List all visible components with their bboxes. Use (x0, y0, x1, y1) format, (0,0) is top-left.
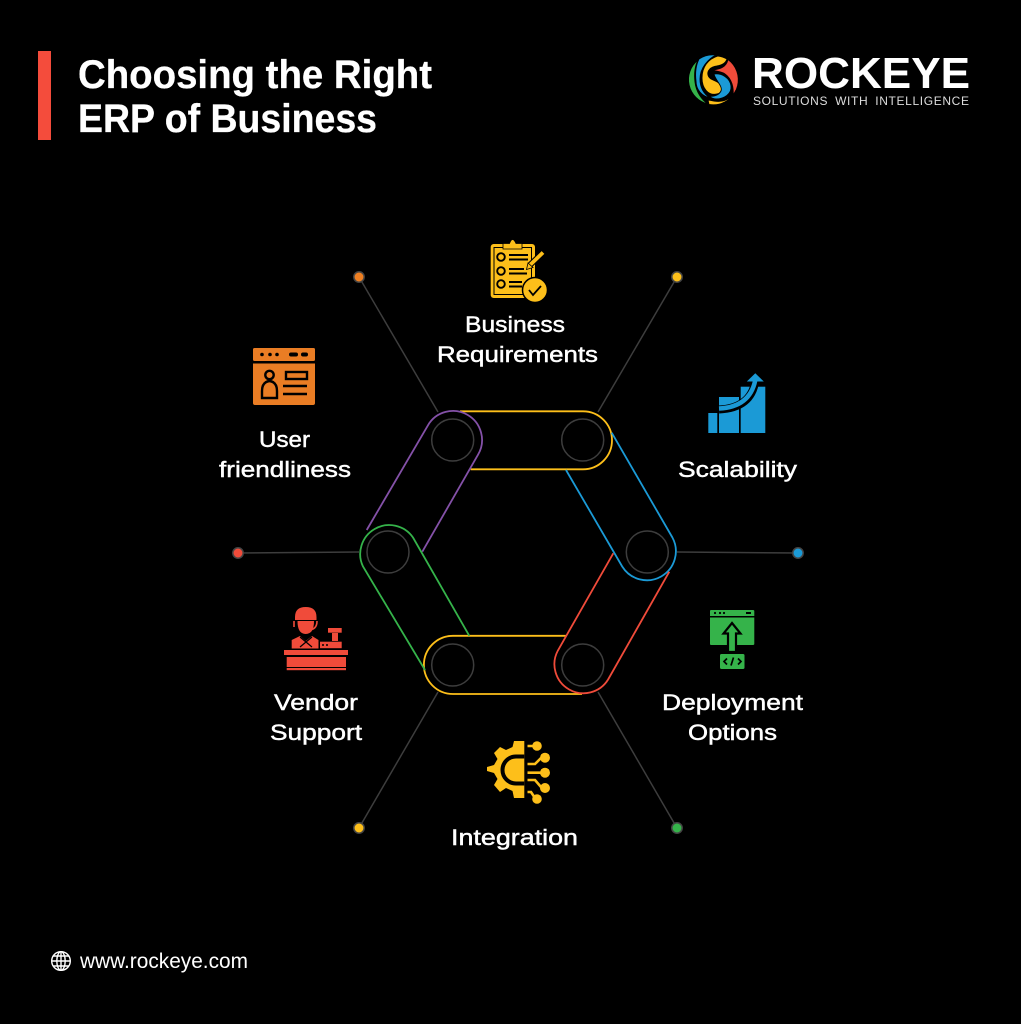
link: red (554, 553, 669, 693)
footer: website (52, 950, 248, 973)
spoke end dots (233, 272, 803, 833)
spokes (238, 277, 798, 828)
website address: www.rockeye.com (79, 950, 248, 973)
icon: deployment window with code (710, 610, 754, 669)
link: blue (566, 433, 676, 580)
label: Business Requirements: Requirements (437, 342, 598, 367)
link: purple (367, 411, 482, 552)
link: top yellow (460, 411, 612, 469)
logo swirl icon (689, 55, 738, 105)
label: User friendliness: User (259, 427, 311, 452)
icon: support agent at desk (284, 607, 348, 670)
link: green (360, 525, 469, 670)
label: User friendliness (219, 427, 351, 482)
joint circles (367, 419, 668, 686)
icon: growth bars with arrow (708, 373, 765, 433)
label: Vendor Support: Support (270, 720, 363, 745)
label: Deployment Options: Deployment (662, 690, 804, 715)
label: Scalability: Scalability (678, 457, 798, 482)
label: User friendliness: friendliness (219, 457, 351, 482)
label: Deployment Options: Options (688, 720, 777, 745)
label: Integration: Integration (451, 825, 578, 850)
label: Business Requirements (437, 312, 598, 367)
title (78, 53, 432, 141)
icon: clipboard checklist (491, 240, 548, 302)
label: Vendor Support (270, 690, 363, 745)
hexagon chain diagram (360, 411, 676, 694)
logo: Rockeye (689, 49, 970, 108)
icon: user profile window (253, 348, 315, 405)
logo tagline: SOLUTIONS WITH INTELLIGENCE (753, 94, 969, 108)
label: Deployment Options (662, 690, 804, 745)
icon: globe (52, 952, 70, 970)
icon: gear with circuit nodes (487, 741, 550, 804)
title: Choosing the Right (78, 53, 432, 97)
logo wordmark: ROCKEYE (752, 49, 970, 98)
title: ERP of Business (78, 97, 377, 141)
link: bottom yellow (424, 636, 582, 694)
label: Vendor Support: Vendor (274, 690, 359, 715)
label: Business Requirements: Business (465, 312, 565, 337)
title accent bar (38, 51, 51, 140)
